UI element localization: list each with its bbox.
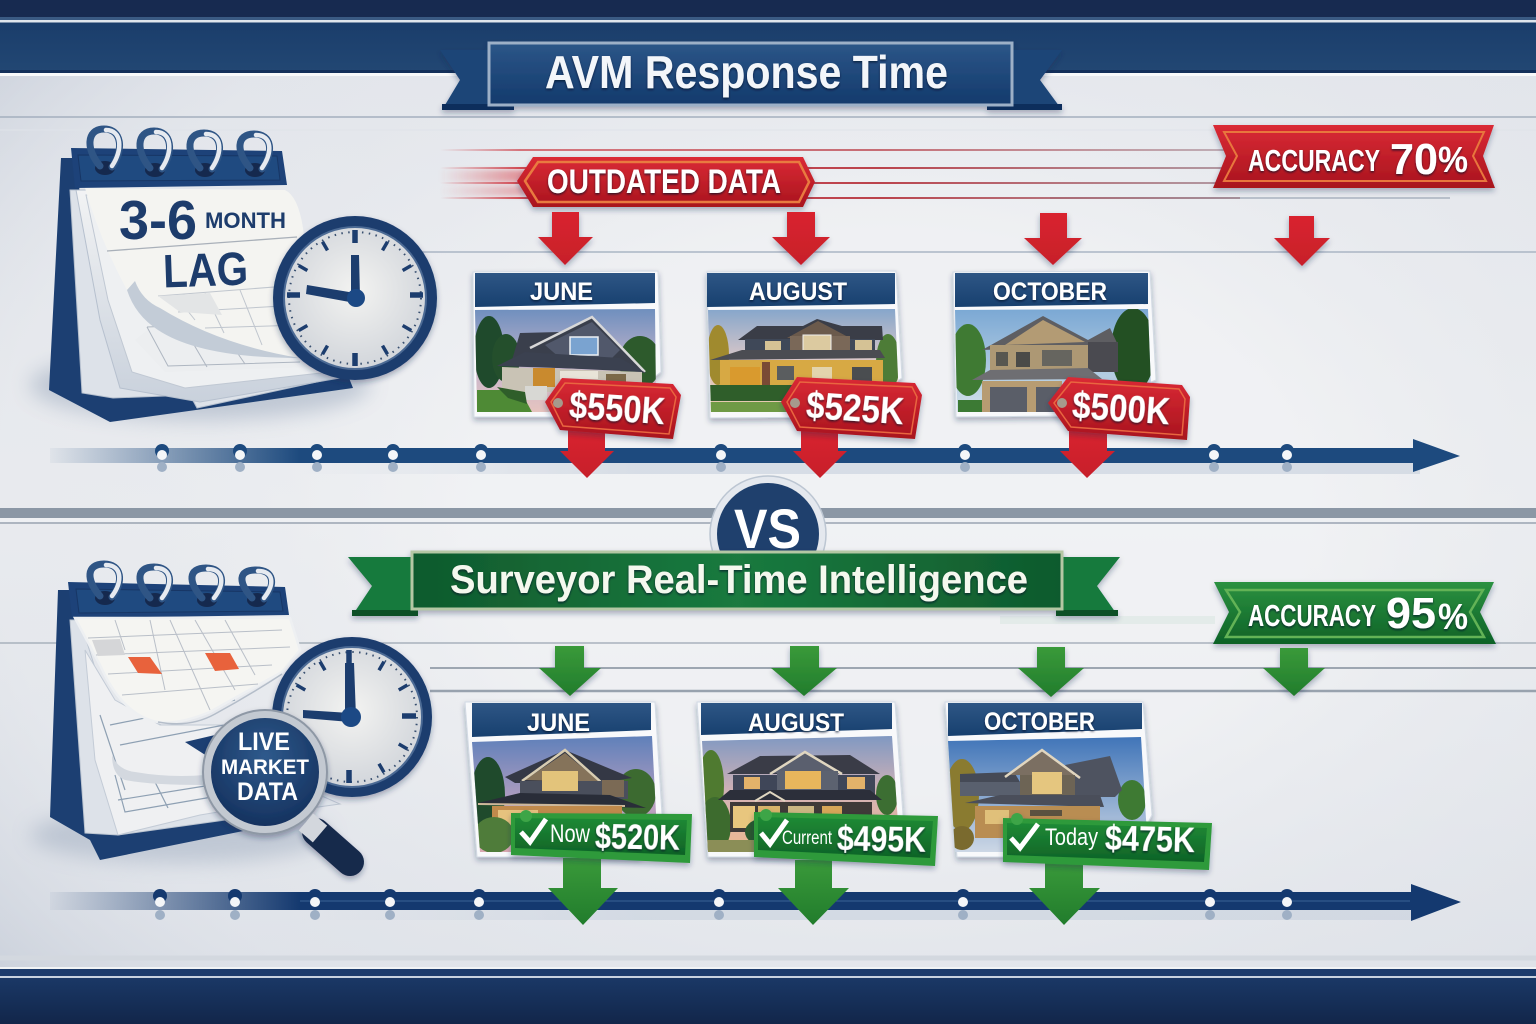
clock hands bbox=[306, 255, 365, 307]
badge label: OUTDATED DATA bbox=[547, 163, 781, 201]
back pages bbox=[70, 190, 340, 408]
month header bbox=[475, 273, 655, 307]
sheet grid bbox=[88, 620, 290, 710]
red arrows beneath tags bbox=[560, 428, 1115, 478]
price tag: $550K bbox=[545, 378, 681, 439]
price tag: now $520K bbox=[511, 810, 692, 863]
green ribbon: Surveyor Real-Time Intelligence bbox=[348, 552, 1120, 616]
month header bbox=[707, 273, 895, 307]
bottom timeline bbox=[50, 884, 1461, 921]
price: $520K bbox=[595, 817, 680, 858]
clock: live bbox=[272, 637, 432, 797]
title text: AVM Response Time bbox=[545, 46, 948, 98]
calendar text: lag: LAG bbox=[162, 242, 249, 297]
badge: outdated data bbox=[517, 157, 815, 207]
photo card: October (outdated) bbox=[950, 271, 1156, 417]
green arrows beneath tags bbox=[548, 858, 1100, 925]
month label: JUNE bbox=[527, 709, 590, 737]
price: $500K bbox=[1071, 385, 1172, 433]
red streak lines bbox=[440, 150, 1240, 198]
binder rings bbox=[90, 564, 272, 607]
VS badge bbox=[710, 476, 826, 592]
ribbon text: Surveyor Real-Time Intelligence bbox=[450, 558, 1028, 602]
check mark bbox=[1011, 824, 1038, 848]
month header bbox=[701, 703, 892, 735]
percent sign: % bbox=[1438, 139, 1468, 180]
VS text: VS bbox=[734, 497, 801, 560]
tag word: Current bbox=[782, 828, 833, 849]
photo card: August (outdated) bbox=[707, 271, 902, 418]
accuracy value: 70 bbox=[1390, 135, 1438, 184]
clock hands bbox=[303, 663, 361, 727]
calendar: 3-6 month lag bbox=[30, 129, 370, 422]
price: $550K bbox=[568, 385, 667, 433]
title ribbon: AVM Response Time bbox=[440, 43, 1062, 110]
back pages bbox=[70, 620, 340, 835]
price tag: today $475K bbox=[1003, 813, 1212, 870]
magnifier: live market data bbox=[203, 710, 350, 862]
month header bbox=[472, 703, 651, 737]
binder rings bbox=[90, 129, 270, 177]
month label: OCTOBER bbox=[993, 278, 1107, 306]
check mark bbox=[761, 820, 787, 844]
month header bbox=[955, 273, 1148, 307]
month header bbox=[948, 703, 1142, 736]
ribbon: accuracy 95% bbox=[1213, 582, 1496, 644]
price tag: $500K bbox=[1048, 377, 1190, 440]
check mark bbox=[521, 819, 546, 842]
red arrows row bbox=[538, 212, 1330, 266]
month label: JUNE bbox=[530, 278, 593, 306]
house photo bbox=[945, 736, 1155, 854]
magnifier handle bbox=[306, 822, 350, 862]
price tag: current $495K bbox=[754, 809, 938, 866]
house photo bbox=[698, 735, 905, 855]
price: $525K bbox=[805, 385, 906, 433]
red date cell bbox=[205, 653, 239, 671]
house photo bbox=[950, 308, 1155, 413]
top timeline bbox=[50, 439, 1460, 474]
percent sign: % bbox=[1438, 596, 1468, 637]
red date cell bbox=[128, 657, 162, 674]
green arrows row bbox=[539, 646, 1325, 697]
ribbon: accuracy 70% bbox=[1213, 125, 1495, 188]
accuracy label: ACCURACY bbox=[1248, 598, 1376, 633]
photo card: October (live) bbox=[945, 702, 1155, 857]
front calendar sheet bbox=[85, 188, 318, 358]
lens text: live: LIVE bbox=[238, 728, 290, 756]
month label: OCTOBER bbox=[984, 708, 1095, 736]
calendar header bar bbox=[71, 148, 287, 188]
calendar board bbox=[50, 590, 263, 860]
calendar header bar bbox=[68, 582, 289, 618]
house photo bbox=[474, 309, 661, 413]
month label: AUGUST bbox=[748, 709, 844, 737]
calendar text: month: MONTH bbox=[205, 208, 286, 233]
tag word: Today bbox=[1045, 824, 1098, 851]
accuracy value: 95 bbox=[1386, 589, 1436, 638]
lens text: market: MARKET bbox=[221, 756, 309, 779]
top navy band bbox=[0, 0, 1536, 76]
front calendar sheet bbox=[75, 618, 300, 723]
photo card: June (live) bbox=[465, 702, 662, 857]
house photo bbox=[707, 309, 900, 413]
calendar: live market data bbox=[30, 564, 340, 863]
photo card: June (outdated) bbox=[473, 271, 661, 417]
calendar board bbox=[49, 158, 353, 422]
bottom navy band bbox=[0, 967, 1536, 1024]
lens text: data: DATA bbox=[237, 778, 298, 806]
price: $495K bbox=[837, 819, 926, 860]
page curl bbox=[127, 281, 300, 358]
house photo bbox=[470, 736, 660, 854]
month label: AUGUST bbox=[749, 278, 847, 306]
tag word: Now bbox=[550, 820, 591, 848]
calendar text: 3-6: 3-6 bbox=[119, 189, 197, 251]
clock: lag bbox=[273, 216, 437, 380]
photo card: August (live) bbox=[697, 702, 905, 857]
price tag: $525K bbox=[781, 377, 922, 439]
price: $475K bbox=[1104, 819, 1195, 860]
accuracy label: ACCURACY bbox=[1248, 143, 1380, 178]
